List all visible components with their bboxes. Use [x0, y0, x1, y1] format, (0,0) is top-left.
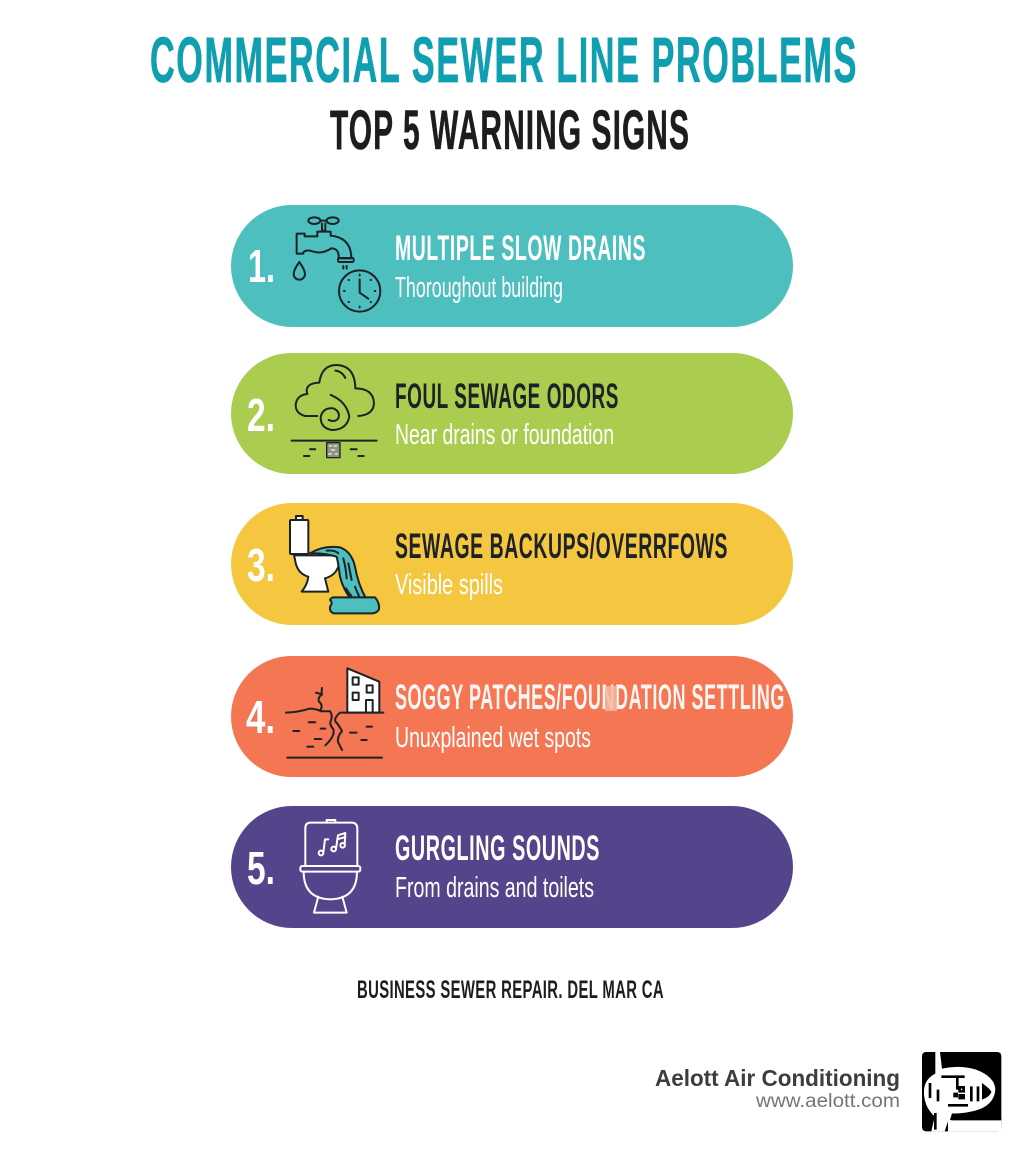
footer caption: BUSINESS SEWER REPAIR. DEL MAR CA — [357, 976, 664, 1004]
brand name: Aelott Air Conditioning — [655, 1065, 900, 1091]
subtext 3: Visible spills — [395, 569, 503, 601]
heading 1: MULTIPLE SLOW DRAINS — [395, 229, 646, 268]
number 5: 5. — [247, 842, 275, 894]
icon: overflowing toilet — [290, 516, 379, 613]
number 4: 4. — [246, 691, 275, 743]
icon: odor cloud over drain — [292, 365, 377, 458]
panel: warning sign 4 — [231, 656, 793, 777]
brand url: www.aelott.com — [755, 1091, 900, 1112]
panel: warning sign 2 — [231, 353, 793, 474]
subtext 1: Thoroughout building — [395, 272, 563, 304]
icon: gurgling toilet with music notes — [300, 820, 360, 913]
panel: warning sign 5 — [231, 806, 793, 928]
panel: warning sign 1 — [231, 205, 793, 327]
subtitle: TOP 5 WARNING SIGNS — [330, 98, 690, 161]
panel: warning sign 3 — [231, 503, 793, 625]
number 3: 3. — [247, 539, 275, 591]
icon: dripping faucet and clock — [294, 217, 380, 312]
number 2: 2. — [247, 389, 275, 441]
icon: cracked ground and building — [286, 668, 383, 758]
subtext 2: Near drains or foundation — [395, 419, 614, 451]
icon: brand logo — [922, 1052, 1001, 1131]
subtext 5: From drains and toilets — [395, 872, 594, 904]
number 1: 1. — [248, 240, 275, 292]
heading 2: FOUL SEWAGE ODORS — [395, 377, 619, 416]
subtext 4: Unuxplained wet spots — [395, 722, 591, 754]
heading 3: SEWAGE BACKUPS/OVERRFOWS — [395, 527, 728, 566]
heading 5: GURGLING SOUNDS — [395, 829, 600, 868]
